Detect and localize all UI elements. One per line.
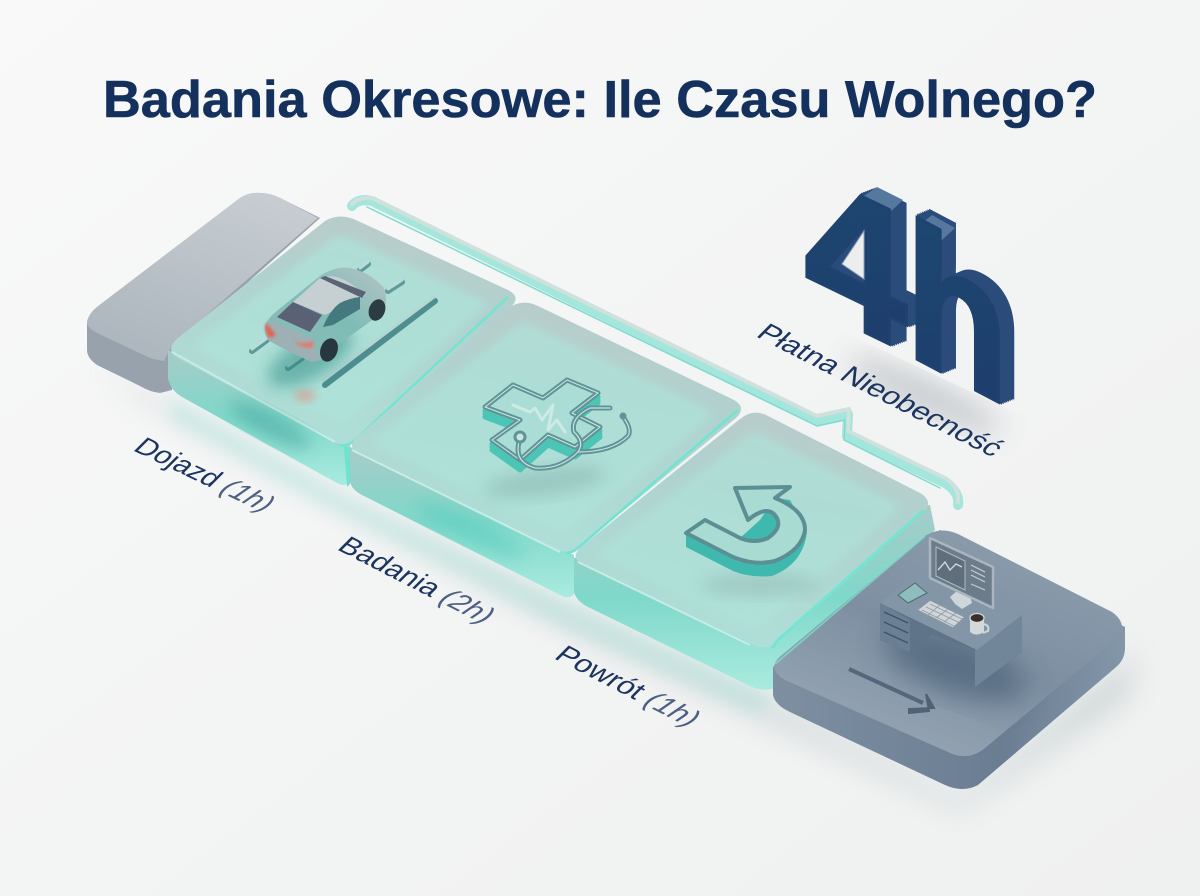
road rails [252,262,435,385]
title: Badania Okresowe: Ile Czasu Wolnego? [103,71,1097,129]
top faces [858,187,955,240]
teal reflection [224,393,316,457]
glass slab 2 [350,303,741,597]
cross extrusion [485,384,600,470]
stethoscope [518,408,610,468]
icon: floor arrow [849,669,934,713]
extrusion layers: h [910,174,1014,448]
front faces: 4 [804,126,908,395]
label: Powrót: Powrót (1h) [549,640,707,732]
icon: car on road [252,262,435,402]
extrusion layers: 4 [808,125,911,394]
ground shadows [90,362,1140,810]
extrusion layers: h [917,172,1021,445]
extrusion layers: 4 [806,125,909,394]
destination slab [773,530,1125,789]
segment: examination [350,303,741,597]
segment: return [574,413,935,690]
icon: medical cross with stethoscope [482,380,629,504]
extrusion layers: h [914,173,1018,447]
side window [323,297,360,327]
start slab [87,193,320,393]
counter of the 4 [842,231,864,279]
label: Dojazd: Dojazd (1h) [127,433,281,518]
arrow extrusion [686,498,807,576]
extrusion layers: h [912,174,1016,448]
icon: office desk [880,538,1022,687]
rear window [277,302,322,332]
extrusion layers: h [915,172,1020,446]
desk body [880,603,1022,687]
rear face [265,321,320,362]
icon: return arrow [686,487,820,596]
extrusion layers: h [908,175,1013,449]
monitor [930,538,993,608]
extrusion layers: 4 [814,122,917,391]
arrow face [686,487,805,563]
roof [293,276,365,315]
tail lights [266,323,276,338]
label: Badania: Badania (2h) [332,531,502,629]
glass slab 3 [574,413,935,690]
extrusion layers: 4 [815,122,919,391]
coffee cup [970,620,984,634]
big number: 4h: h [905,177,1009,450]
extrusion layers: 4 [819,120,923,389]
extrusion layers: h [907,176,1011,450]
extrusion layers: 4 [812,123,915,392]
extrusion layers: 4 [810,124,913,393]
keyboard [917,600,965,628]
book [898,583,927,603]
extrusion layers: 4 [817,121,921,390]
monitor stand [950,590,972,609]
glass slab 1 [168,216,516,487]
extrusion layers: h [919,171,1023,445]
desk top [880,568,1022,650]
extrusion layers [806,120,1023,450]
label: Płatna Nieobecność: Płatna Nieobecność [751,318,1010,462]
cross face [485,380,600,460]
car body [265,268,386,362]
segment: commute [168,216,516,487]
big number: 4h [804,120,1023,450]
bracket: paid absence span [352,198,958,505]
heartbeat line [513,405,565,432]
wheels [317,336,341,364]
